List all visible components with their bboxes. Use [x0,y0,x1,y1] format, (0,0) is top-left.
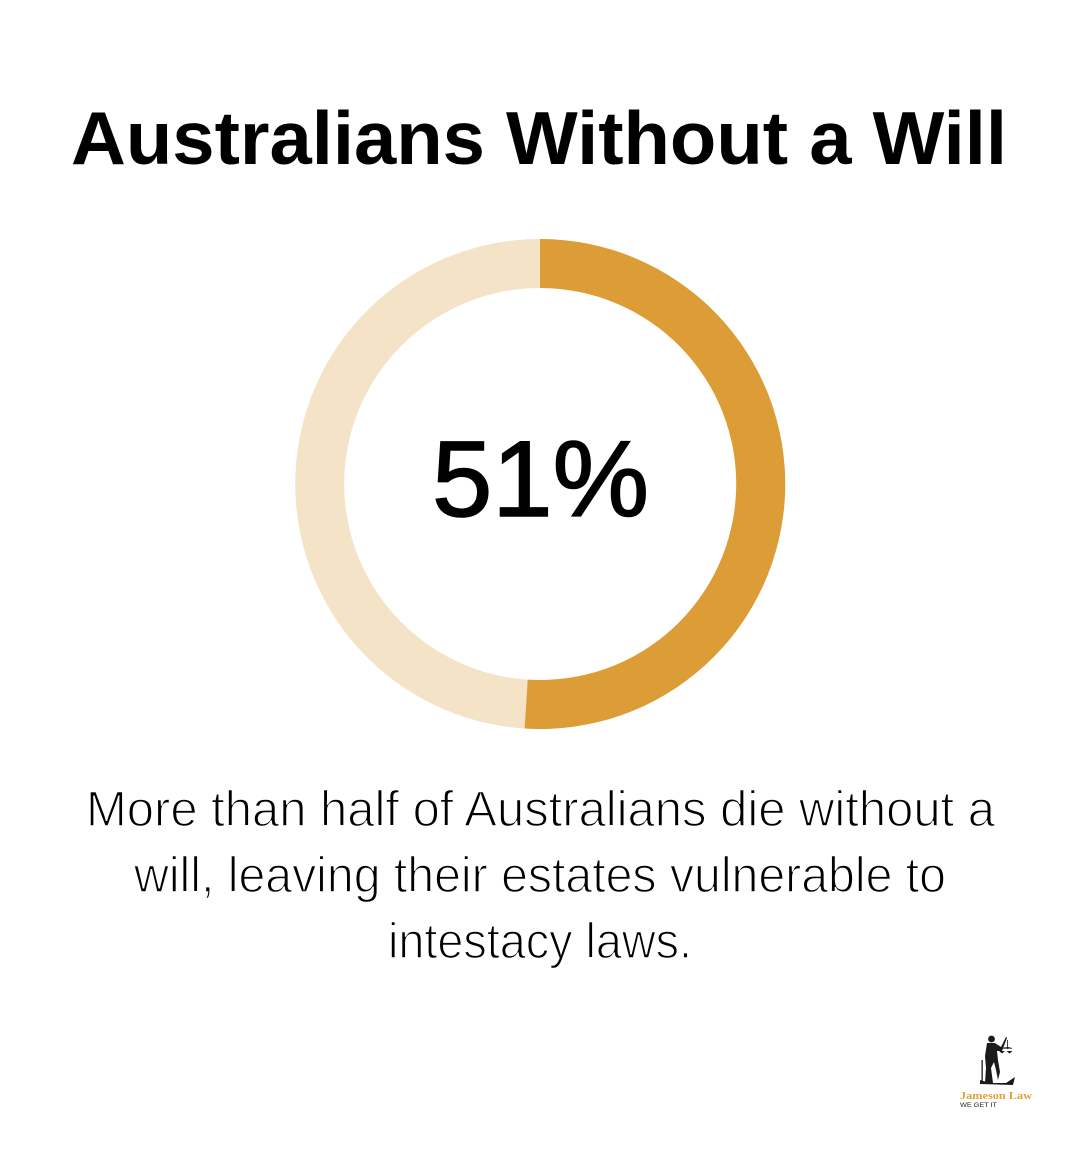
description text: intestacy laws. [388,913,692,969]
donut value segment [525,239,785,729]
icon: lady justice figure [980,1036,1015,1085]
logo name: Jameson Law [960,1091,1032,1102]
donut centre value: 51% [432,418,649,539]
description text: More than half of Australians die without a [86,781,995,837]
donut chart: 51 percent [295,239,785,729]
description text [86,781,995,969]
logo tagline: WE GET IT [960,1102,997,1109]
title: Australians Without a Will [71,96,1007,180]
logo: Jameson Law [960,1036,1032,1109]
donut remainder segment [295,239,540,728]
description text: will, leaving their estates vulnerable to [133,847,946,903]
